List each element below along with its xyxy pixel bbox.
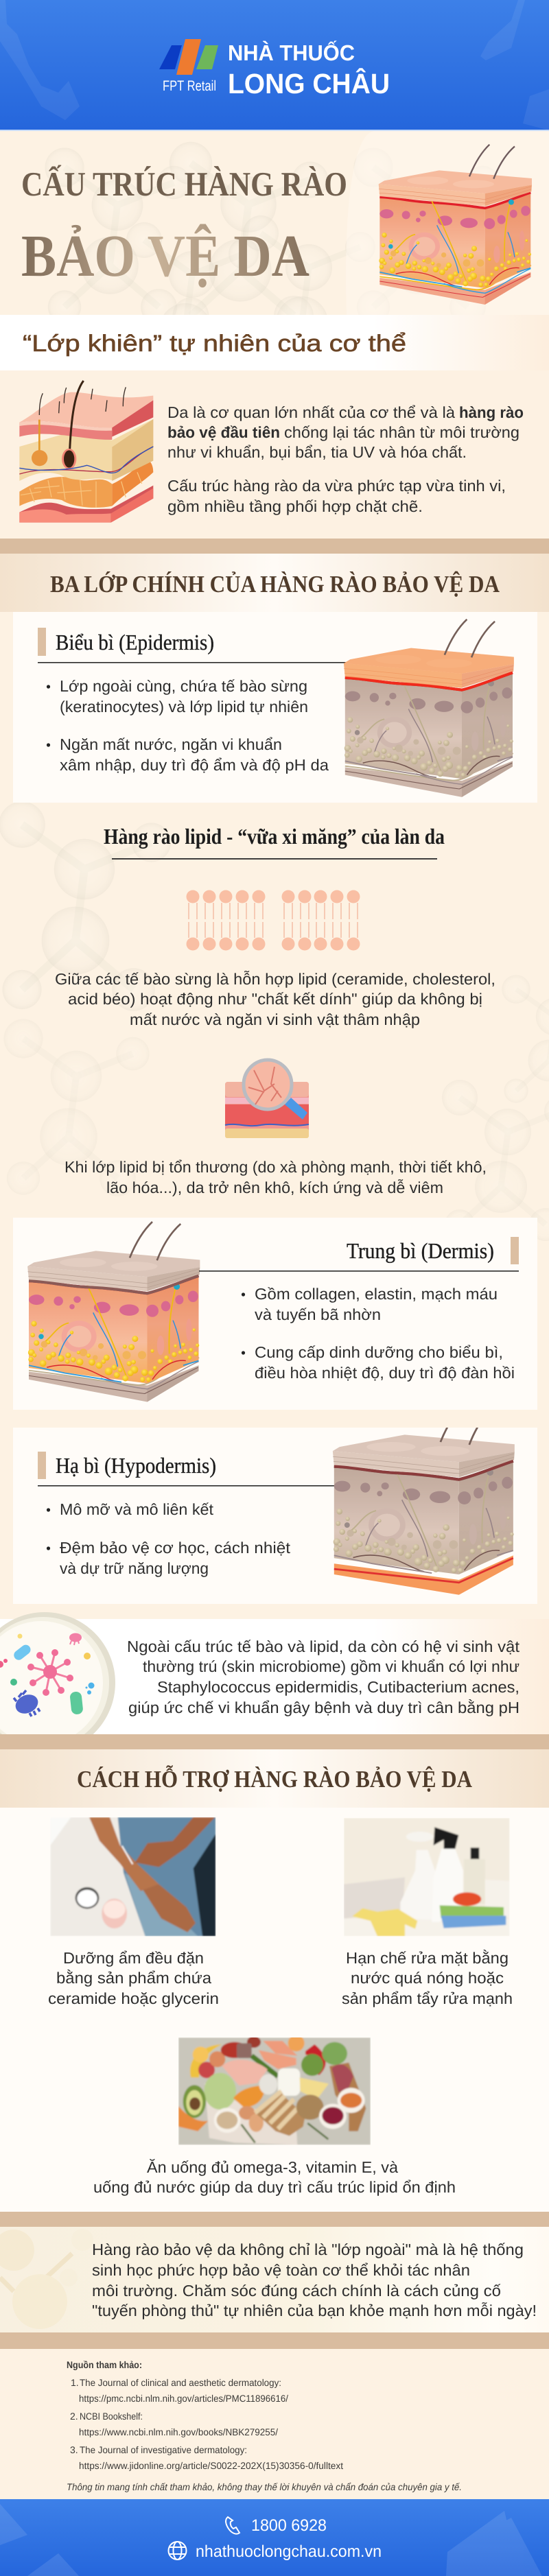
section heading: three layers: BA LỚP CHÍNH CỦA HÀNG RÀO BẢO VỆ DA <box>50 571 500 598</box>
intro text: gồm nhiều tầng phối hợp chặt chẽ. <box>167 497 423 515</box>
text: summary: môi trường. Chăm sóc đúng cách chính là cách củng cố <box>92 2282 501 2300</box>
bullets: epidermis: (keratinocytes) và lớp lipid tự nhiên <box>60 698 308 716</box>
text: lipid damage: Khi lớp lipid bị tổn thương (do xà phòng mạnh, thời tiết khô, <box>65 1158 487 1176</box>
intro text: Cấu trúc hàng rào da vừa phức tạp vừa tinh vi, <box>167 477 506 495</box>
text: microbiome: thường trú (skin microbiome) gồm vi khuẩn có lợi như <box>143 1657 519 1675</box>
illustration: skin cube <box>379 145 532 305</box>
text: summary: Hàng rào bảo vệ da không chỉ là "lớp ngoài" mà là hệ thống <box>92 2241 524 2258</box>
caption: moisturize <box>48 1949 219 2007</box>
text: lipid role: mất nước và ngăn vi sinh vật thâm nhập <box>130 1011 420 1028</box>
reference list: NCBI Bookshelf: <box>80 2411 143 2422</box>
caption: limit harsh washing: sản phẩm tẩy rửa mạnh <box>342 1989 513 2007</box>
text: lipid damage: lão hóa...), da trở nên khô, kích ứng và dễ viêm <box>106 1179 443 1196</box>
reference list: https://www.jidonline.org/article/S0022-202X(15)30356-0/fulltext <box>79 2460 343 2471</box>
bullets: hypodermis: Đệm bảo vệ cơ học, cách nhiệt <box>60 1539 291 1557</box>
illustration: dermis cube <box>27 1222 200 1402</box>
caption: nutrition: uống đủ nước giúp da duy trì cấu trúc lipid ổn định <box>93 2178 456 2196</box>
bullets: dermis: Cung cấp dinh dưỡng cho biểu bì, <box>255 1343 503 1361</box>
icon: magnifier over damaged skin <box>225 1060 309 1138</box>
text: summary: "tuyến phòng thủ" tự nhiên của bạn khỏe mạnh hơn mỗi ngày! <box>92 2302 537 2319</box>
reference list: The Journal of clinical and aesthetic dermatology: <box>80 2377 281 2388</box>
brand name <box>228 40 390 99</box>
reference list: The Journal of investigative dermatology: <box>80 2444 247 2455</box>
decoration: molecule <box>0 2229 93 2329</box>
intro text: như vi khuẩn, bụi bẩn, tia UV và hóa chất. <box>167 443 467 461</box>
bullets: epidermis: Ngăn mất nước, ngăn vi khuẩn <box>60 735 282 753</box>
panel: summary <box>0 2227 549 2332</box>
reference list <box>70 2377 343 2471</box>
photo: cleaning products <box>344 1818 510 1936</box>
reference list: 2. <box>70 2411 78 2422</box>
bullets: dermis <box>242 1285 515 1382</box>
panel: references: Nguồn tham khảo: <box>67 2359 142 2370</box>
bullets: epidermis <box>47 677 329 774</box>
text: summary <box>92 2241 537 2319</box>
title: BẢO VỆ DA <box>21 222 309 289</box>
logo: FPT Retail <box>159 39 218 94</box>
text: lipid role: Giữa các tế bào sừng là hỗn hợp lipid (ceramide, cholesterol, <box>55 970 495 988</box>
contact: phone: 1800 6928 <box>251 2516 327 2535</box>
intro text: chống lại tác nhân từ môi trường <box>284 423 519 441</box>
text: microbiome: Ngoài cấu trúc tế bào và lipid, da còn có hệ vi sinh vật <box>127 1638 520 1655</box>
panel: references <box>0 2349 549 2499</box>
brand name: NHÀ THUỐC <box>228 40 355 65</box>
hero panel <box>0 131 549 383</box>
reference list: 1. <box>71 2377 79 2388</box>
section heading: three layers <box>0 554 549 612</box>
text: lipid role: acid béo) hoạt động như "chất kết dính" giúp da không bị <box>68 990 482 1008</box>
molecule backdrop <box>0 801 549 1241</box>
reference list: https://www.ncbi.nlm.nih.gov/books/NBK279255/ <box>79 2426 278 2437</box>
panel: skin microbiome <box>0 1612 519 1734</box>
heading: Hạ bì: Hạ bì (Hypodermis) <box>56 1453 216 1478</box>
intro panel <box>0 370 549 539</box>
section heading: how to support <box>0 1749 549 1808</box>
heading: Biểu bì: Biểu bì (Epidermis) <box>56 630 214 654</box>
icon: skin layers <box>19 381 153 523</box>
subtitle band <box>0 315 549 370</box>
panel: references: Thông tin mang tính chất tham khảo, không thay thế lời khuyên và chẩn đoán của chuyên gia y tế. <box>67 2481 462 2492</box>
diagram: lipid bilayer <box>187 890 360 951</box>
caption: moisturize: Dưỡng ẩm đều đặn <box>63 1949 204 1967</box>
header banner <box>0 0 549 131</box>
text: microbiome <box>127 1638 520 1716</box>
brand name: LONG CHÂU <box>228 68 390 99</box>
caption: nutrition: Ăn uống đủ omega-3, vitamin E, và <box>147 2158 398 2176</box>
heading: lipid barrier: Hàng rào lipid - “vữa xi măng” của làn da <box>104 824 445 849</box>
heading: Trung bì: Trung bì (Dermis) <box>347 1238 494 1263</box>
text: microbiome: giúp ức chế vi khuẩn gây bệnh và duy trì cân bằng pH <box>128 1699 519 1716</box>
bullets: hypodermis: Mô mỡ và mô liên kết <box>60 1500 214 1518</box>
panel: hypodermis <box>13 1428 537 1604</box>
intro text: Da là cơ quan lớn nhất của cơ thể và là <box>167 403 455 421</box>
text: lipid damage <box>65 1158 487 1196</box>
photo: moisturizing arm <box>50 1817 215 1936</box>
footer <box>0 2499 549 2576</box>
bullets: dermis: Gồm collagen, elastin, mạch máu <box>255 1285 498 1303</box>
reference list: 3. <box>70 2444 78 2455</box>
caption: limit harsh washing: nước quá nóng hoặc <box>351 1969 504 1987</box>
bullets: dermis: và tuyến bã nhờn <box>255 1305 381 1323</box>
bullets: hypodermis <box>47 1500 291 1577</box>
bullets: epidermis: xâm nhập, duy trì độ ẩm và độ pH da <box>60 756 329 774</box>
icon: petri dish with microbes <box>0 1612 115 1734</box>
caption: moisturize: ceramide hoặc glycerin <box>48 1989 219 2007</box>
contact: website: nhathuoclongchau.com.vn <box>196 2542 382 2561</box>
title: CẤU TRÚC HÀNG RÀO <box>21 165 347 203</box>
section heading: how to support: CÁCH HỖ TRỢ HÀNG RÀO BẢO VỆ DA <box>77 1765 473 1793</box>
panel: dermis <box>13 1218 537 1410</box>
illustration: hypodermis cube <box>333 1404 515 1595</box>
bullets: hypodermis: và dự trữ năng lượng <box>60 1559 209 1577</box>
text: lipid role <box>55 970 495 1028</box>
text: summary: sinh học phức hợp bảo vệ toàn cơ thể khỏi tác nhân <box>92 2261 470 2279</box>
illustration: epidermis cube <box>344 619 514 797</box>
caption: limit harsh washing <box>342 1949 513 2007</box>
reference list: https://pmc.ncbi.nlm.nih.gov/articles/PMC11896616/ <box>79 2393 288 2404</box>
title <box>21 165 347 289</box>
intro text: bảo vệ đầu tiên <box>167 423 280 441</box>
panel: support tips <box>0 1808 549 2212</box>
logo: FPT Retail: FPT Retail <box>163 78 216 94</box>
bullets: epidermis: Lớp ngoài cùng, chứa tế bào sừng <box>60 677 307 695</box>
photo: healthy food <box>178 2035 371 2145</box>
text: microbiome: Staphylococcus epidermidis, Cutibacterium acnes, <box>157 1678 519 1696</box>
intro text <box>167 403 524 515</box>
intro text: hàng rào <box>459 403 524 421</box>
subtitle band: “Lớp khiên” tự nhiên của cơ thể <box>23 331 406 357</box>
decoration: pharmacy storefront <box>0 2504 542 2576</box>
bullets: dermis: điều hòa nhiệt độ, duy trì độ đàn hồi <box>255 1364 515 1382</box>
panel: epidermis <box>13 612 537 803</box>
caption: nutrition <box>93 2158 456 2196</box>
caption: limit harsh washing: Hạn chế rửa mặt bằng <box>346 1949 509 1967</box>
caption: moisturize: bằng sản phẩm chứa <box>56 1969 211 1987</box>
